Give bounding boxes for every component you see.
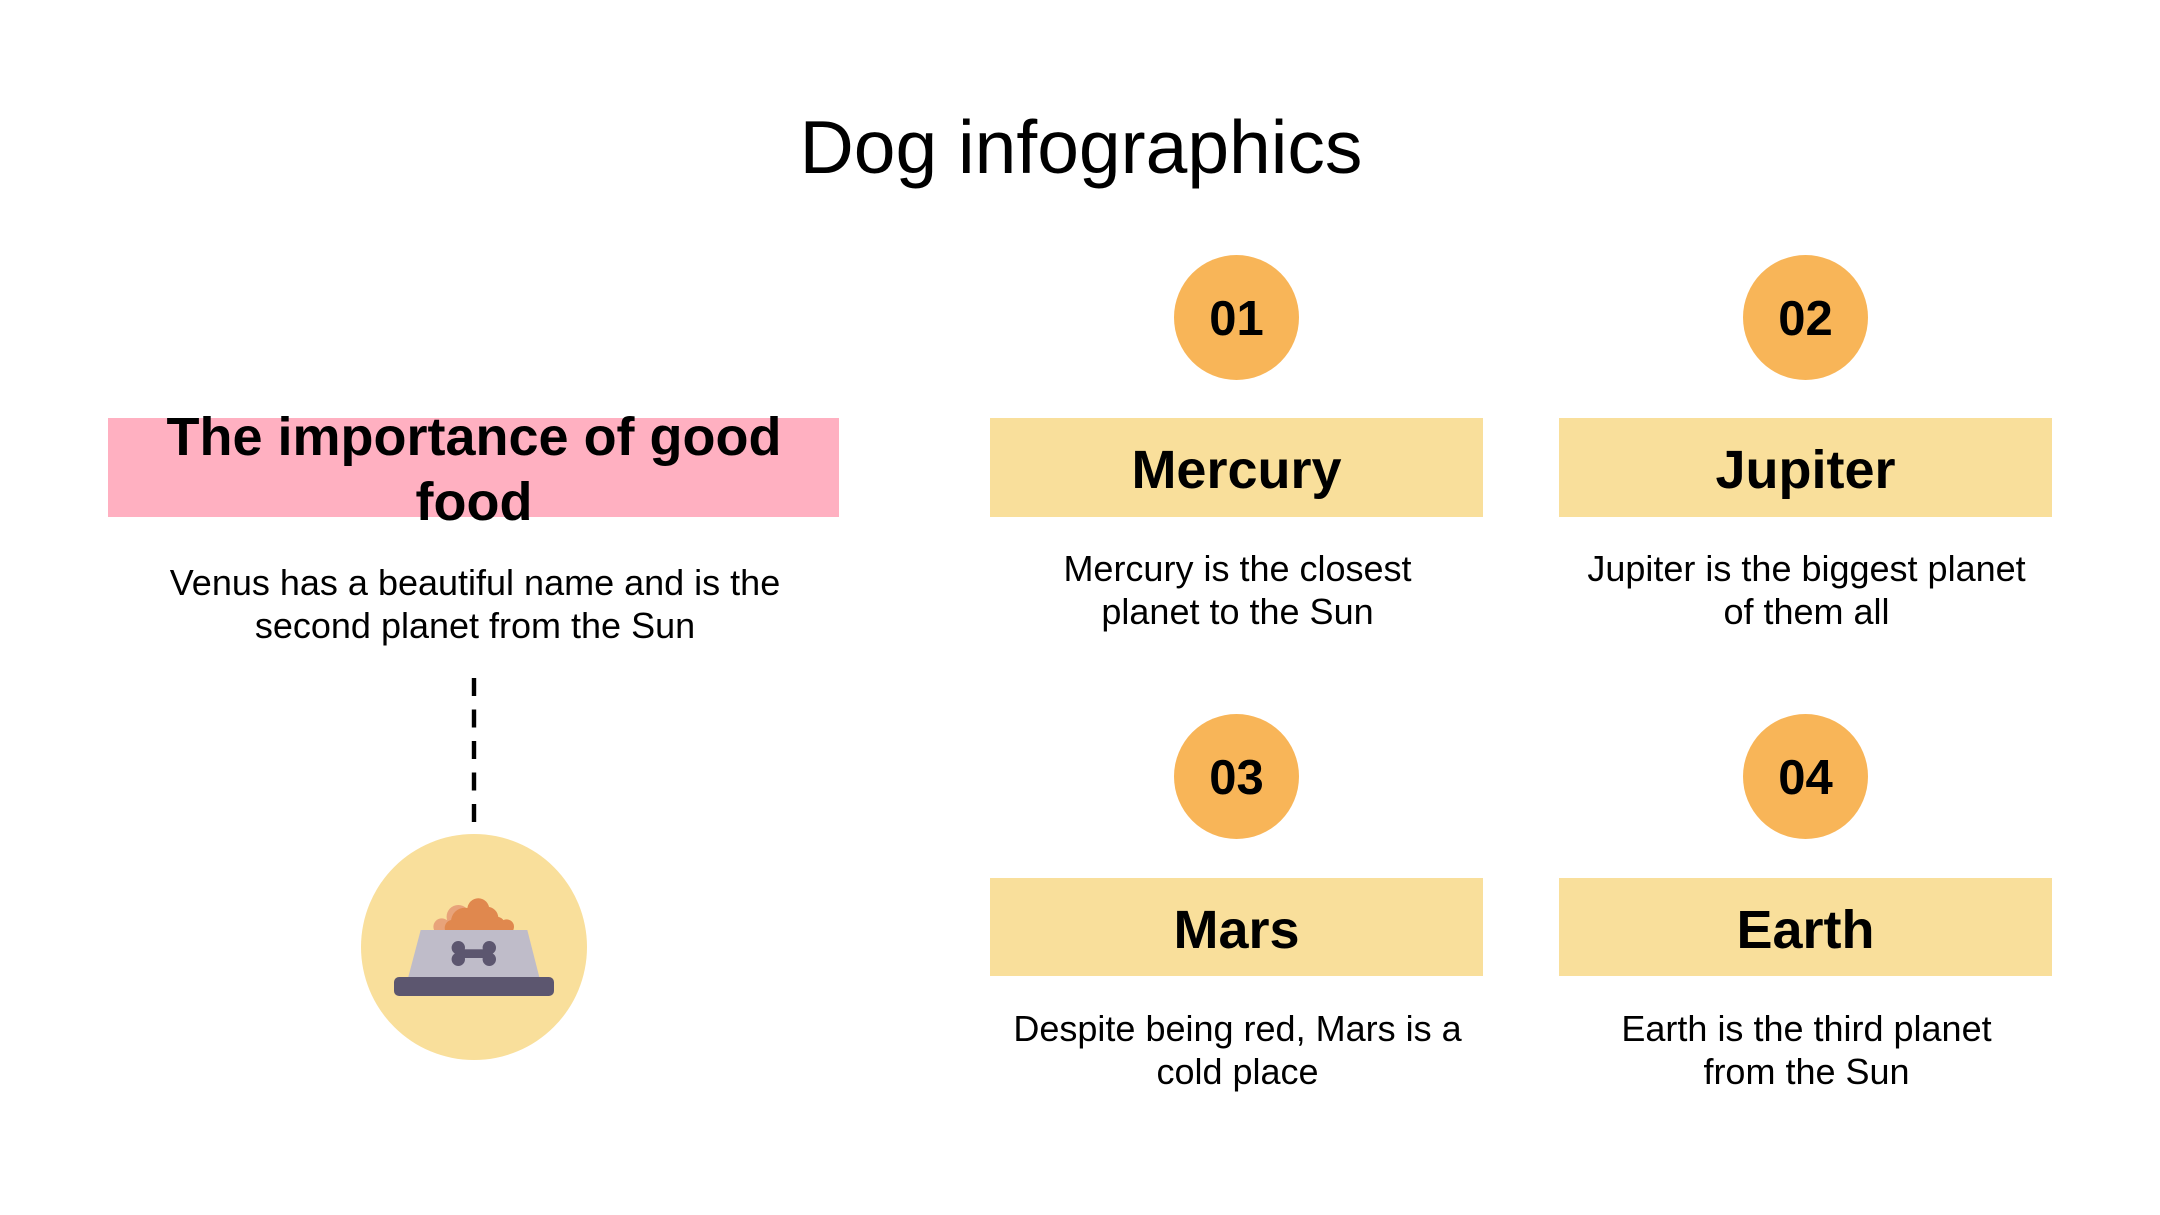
text: Mercury <box>1063 548 1412 632</box>
text: Jupiter: Jupiter is the biggest planet <box>1587 548 2026 589</box>
text: Mercury: planet to the Sun <box>1101 591 1374 632</box>
label: Earth <box>1736 900 1875 960</box>
badge 02: 02 <box>1778 292 1833 346</box>
text block: Venus: Venus has a beautiful name and is the <box>170 562 780 603</box>
badge 01: 01 <box>1209 292 1264 346</box>
text: Earth <box>1621 1008 1992 1092</box>
title: Dog infographics <box>800 105 1362 189</box>
heading: The importance of good <box>166 407 782 467</box>
label: Jupiter <box>1715 440 1896 500</box>
panel: heading banner <box>108 418 839 517</box>
text: Earth: from the Sun <box>1703 1051 1910 1092</box>
panel: Jupiter <box>1559 418 2052 517</box>
badge 01 <box>1174 255 1299 380</box>
text: Mercury: Mercury is the closest <box>1063 548 1412 589</box>
heading <box>166 407 782 532</box>
panel: Earth <box>1559 878 2052 976</box>
text: Mars: cold place <box>1156 1051 1319 1092</box>
badge 03 <box>1174 714 1299 839</box>
icon: dog food bowl <box>361 834 587 1060</box>
panel: Mars <box>990 878 1483 976</box>
text: Mars: Despite being red, Mars is a <box>1013 1008 1462 1049</box>
panel: Mercury <box>990 418 1483 517</box>
text: Earth: Earth is the third planet <box>1621 1008 1992 1049</box>
badge 04 <box>1743 714 1868 839</box>
text block: Venus: second planet from the Sun <box>255 605 695 646</box>
heading: food <box>416 472 532 532</box>
text: Jupiter <box>1587 548 2026 632</box>
text block: Venus <box>170 562 780 646</box>
badge 02 <box>1743 255 1868 380</box>
badge 04: 04 <box>1778 751 1833 805</box>
text: Jupiter: of them all <box>1723 591 1890 632</box>
label: Mars <box>1173 900 1300 960</box>
label: Mercury <box>1131 440 1342 500</box>
text: Mars <box>1013 1008 1462 1092</box>
badge 03: 03 <box>1209 751 1264 805</box>
dashed connector <box>472 678 476 822</box>
